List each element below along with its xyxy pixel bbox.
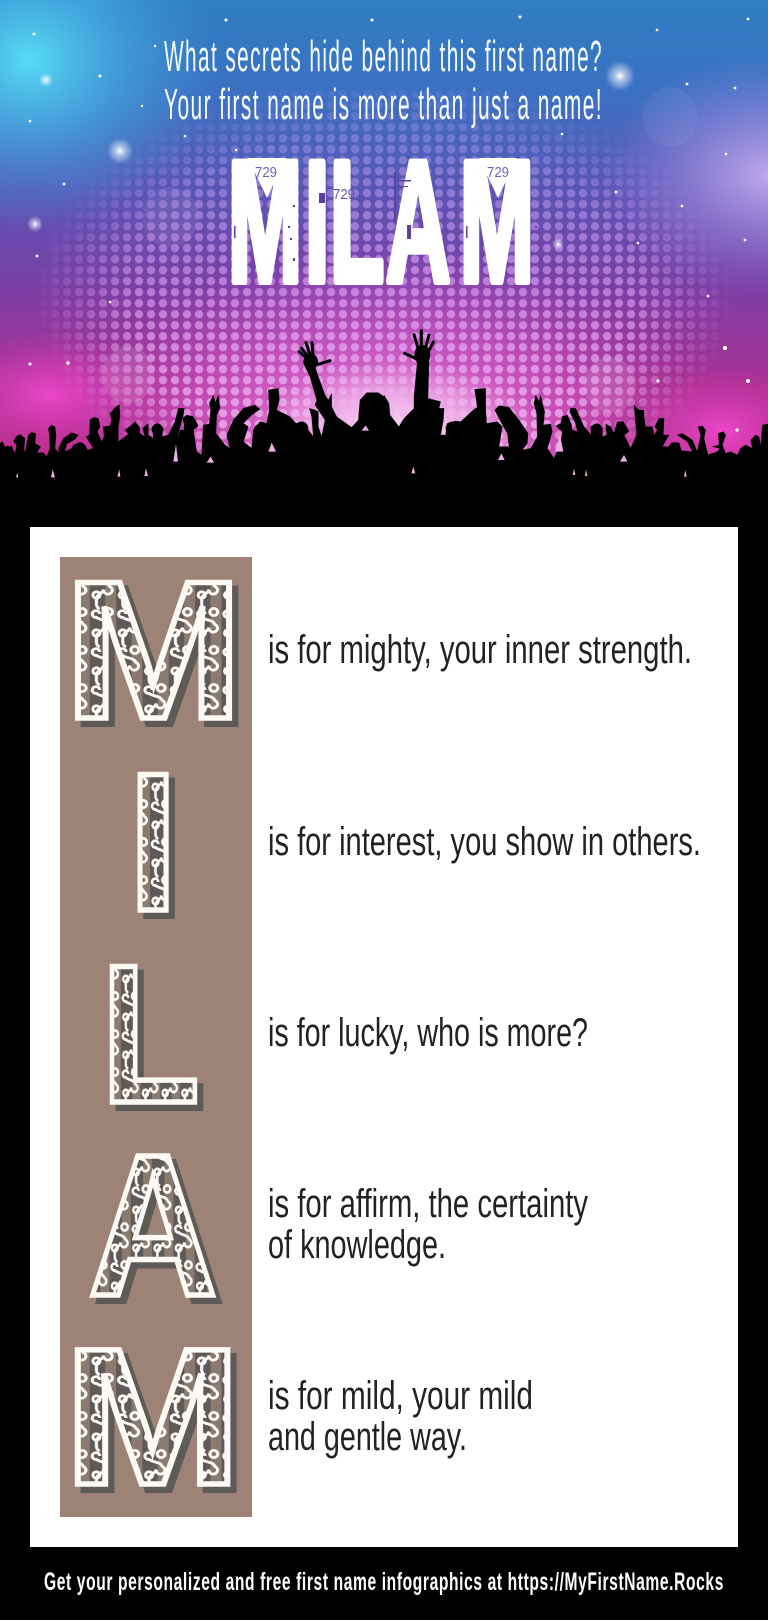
header background: [0, 0, 768, 620]
text block: meanings: [268, 628, 701, 1459]
letter: A: A: [88, 1113, 218, 1338]
letter: L: L: [101, 925, 200, 1145]
meaning: A: of knowledge.: [268, 1223, 446, 1267]
name title: MILAM: 729: [333, 186, 355, 203]
letter: I: I: [134, 739, 184, 959]
letter: L: L: [107, 931, 206, 1151]
letter: M second: M: [64, 1309, 242, 1526]
letter: M: M: [70, 546, 250, 766]
meaning: M second: is for mild, your mild: [268, 1374, 533, 1418]
meaning: M second: and gentle way.: [268, 1415, 467, 1459]
letter: M: M: [64, 540, 244, 760]
meaning: L: is for lucky, who is more?: [268, 1011, 588, 1055]
name title: MILAM: MILAM: [228, 127, 534, 319]
meaning: M second: [268, 1374, 533, 1459]
name title: MILAM: 729: [487, 164, 509, 181]
sparkling stars: [27, 16, 750, 432]
meaning: A: [268, 1182, 588, 1267]
letter: M second: M: [70, 1315, 248, 1532]
letter: A: A: [94, 1119, 224, 1344]
dot light grid: [51, 90, 719, 454]
name title: MILAM: 729: [255, 164, 277, 181]
panel: acrostic letter column: [60, 540, 252, 1532]
crowd silhouette: [0, 331, 768, 530]
meaning: A: is for affirm, the certainty: [268, 1182, 588, 1226]
crowd gaps: [16, 425, 768, 477]
letter: I: I: [128, 733, 178, 953]
heading: secrets question: [164, 32, 603, 129]
panel: white card: [30, 527, 738, 1547]
